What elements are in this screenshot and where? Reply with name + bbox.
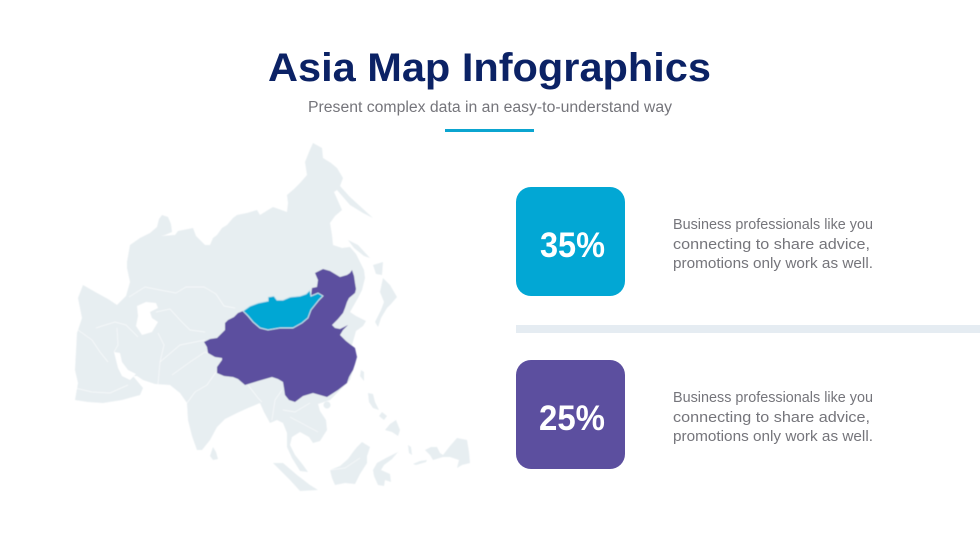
text block: 25% description: connecting to share advice,	[673, 410, 870, 426]
text block: 25% description	[673, 390, 873, 445]
text block: 35% description: Business professionals like you	[673, 217, 873, 233]
stat box	[516, 187, 625, 296]
map: country borders	[75, 287, 360, 470]
text block: 25% description: promotions only work as well.	[673, 429, 873, 445]
text block: 25% description: Business professionals like you	[673, 390, 873, 406]
text block: 35% description	[673, 217, 873, 272]
map: China highlight	[204, 269, 357, 402]
map: Asia	[75, 143, 470, 491]
title: Asia Map Infographics	[268, 46, 711, 90]
map: caspian sea and persian gulf cutouts	[114, 302, 158, 380]
panel: 25% stat	[516, 360, 625, 469]
map: Mongolia highlight	[243, 290, 323, 330]
text block: 35% description: connecting to share advice,	[673, 237, 870, 253]
text block: 35% description: promotions only work as well.	[673, 256, 873, 272]
stat box	[516, 360, 625, 469]
divider bar	[516, 325, 980, 333]
subtitle: Present complex data in an easy-to-understand way	[308, 99, 672, 116]
title accent underline	[445, 129, 534, 132]
map: grey mainland and islands	[75, 143, 470, 491]
stat value: 25%	[539, 399, 605, 438]
stat value: 35%	[540, 226, 605, 265]
panel: 35% stat	[516, 187, 625, 296]
